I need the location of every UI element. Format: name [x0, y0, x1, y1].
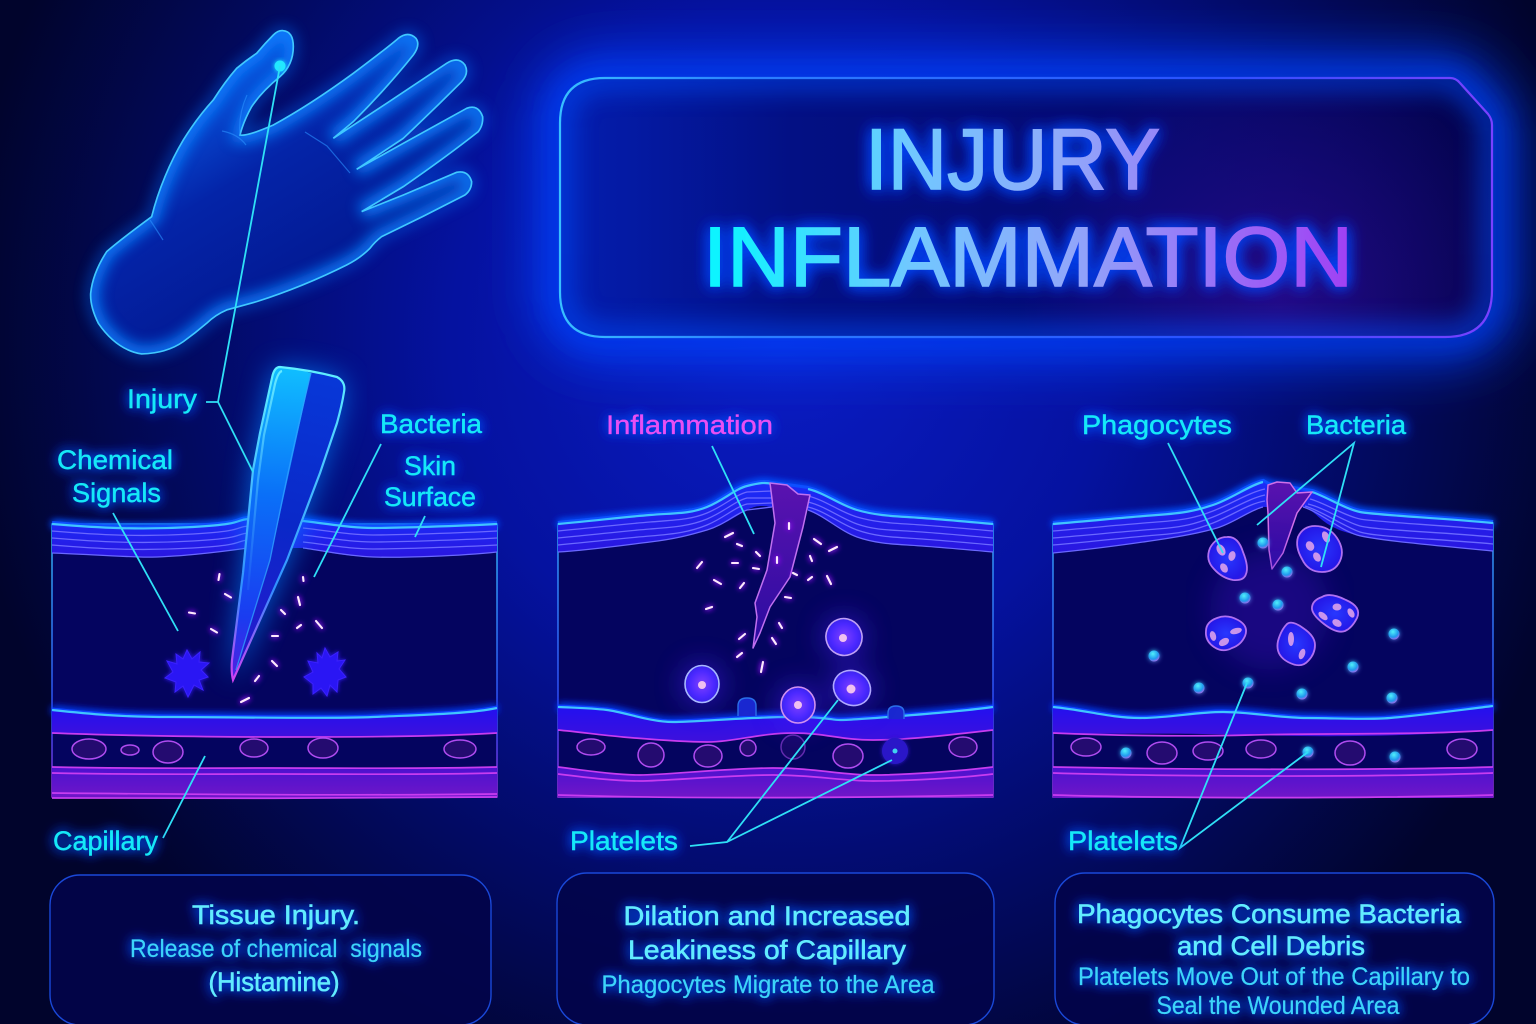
labels: Skin — [404, 451, 456, 481]
phagocytes migrating — [682, 613, 877, 725]
title text — [703, 112, 1353, 304]
leader lines — [1168, 443, 1354, 848]
injury point on thumb — [274, 60, 286, 72]
palm crease lines — [150, 95, 350, 240]
blood cells — [1071, 738, 1477, 765]
labels: Signals — [72, 478, 161, 508]
needle / splinter — [232, 367, 344, 680]
caption text 2 — [602, 901, 935, 999]
caption text 2: Leakiness of Capillary — [628, 935, 907, 965]
labels: Phagocytes — [1082, 410, 1232, 440]
labels: Injury — [127, 384, 198, 414]
wound channel — [1267, 482, 1312, 569]
illustration: hand with injury — [91, 31, 483, 354]
skin surface — [52, 519, 497, 557]
swollen skin — [558, 483, 993, 552]
bacteria dashes — [189, 574, 322, 702]
title text: INFLAMMATION — [703, 210, 1353, 304]
leader lines — [113, 66, 425, 838]
platelets — [1120, 538, 1400, 762]
caption text 3: Seal the Wounded Area — [1156, 992, 1400, 1020]
panel: dilation diagram — [558, 410, 993, 856]
caption card 2 — [557, 873, 994, 1024]
labels: Surface — [384, 482, 476, 512]
labels — [53, 384, 483, 856]
panel: phagocytes diagram — [1053, 410, 1493, 856]
leader lines — [690, 446, 892, 846]
labels: Platelets — [1068, 826, 1178, 856]
tissue box — [1053, 482, 1493, 797]
engulfed bacteria — [1209, 530, 1356, 660]
labels — [1068, 410, 1407, 856]
platelet in capillary — [882, 738, 908, 764]
label: Inflammation: Inflammation — [606, 410, 773, 440]
swollen skin — [1053, 482, 1493, 553]
caption text 1: Release of chemical signals — [130, 935, 422, 963]
tissue box — [558, 483, 993, 797]
capillary — [558, 707, 993, 798]
label: Platelets: Platelets — [570, 826, 678, 856]
caption text 3 — [1077, 899, 1470, 1020]
caption text 2: Dilation and Increased — [624, 901, 910, 931]
tissue box — [52, 524, 497, 797]
caption text 1: Tissue Injury. — [192, 900, 360, 930]
chemical signal stars — [165, 648, 346, 697]
nuclei — [698, 634, 856, 709]
title text: INJURY — [865, 112, 1160, 208]
panel: tissue injury diagram — [52, 66, 497, 856]
blood cells — [72, 738, 476, 763]
title panel — [560, 78, 1492, 337]
phagocytes with engulfed bacteria — [1206, 526, 1358, 670]
caption card 1 — [50, 875, 491, 1024]
caption text 3: Platelets Move Out of the Capillary to — [1078, 963, 1470, 991]
labels: Chemical — [57, 445, 173, 475]
blood cells — [577, 735, 977, 768]
labels: Bacteria — [380, 409, 483, 439]
caption text 1: (Histamine) — [208, 967, 340, 997]
caption text 2: Phagocytes Migrate to the Area — [602, 971, 935, 999]
wound channel — [753, 483, 810, 648]
caption text 1 — [130, 900, 422, 997]
bacteria dashes — [697, 523, 837, 672]
labels: Bacteria — [1306, 410, 1407, 440]
labels: Capillary — [53, 826, 158, 856]
capillary — [1053, 706, 1493, 798]
caption card 3 — [1055, 873, 1494, 1024]
caption text 3: and Cell Debris — [1177, 931, 1365, 961]
capillary — [52, 708, 497, 798]
caption text 3: Phagocytes Consume Bacteria — [1077, 899, 1462, 929]
emerging cell stubs — [738, 698, 904, 719]
